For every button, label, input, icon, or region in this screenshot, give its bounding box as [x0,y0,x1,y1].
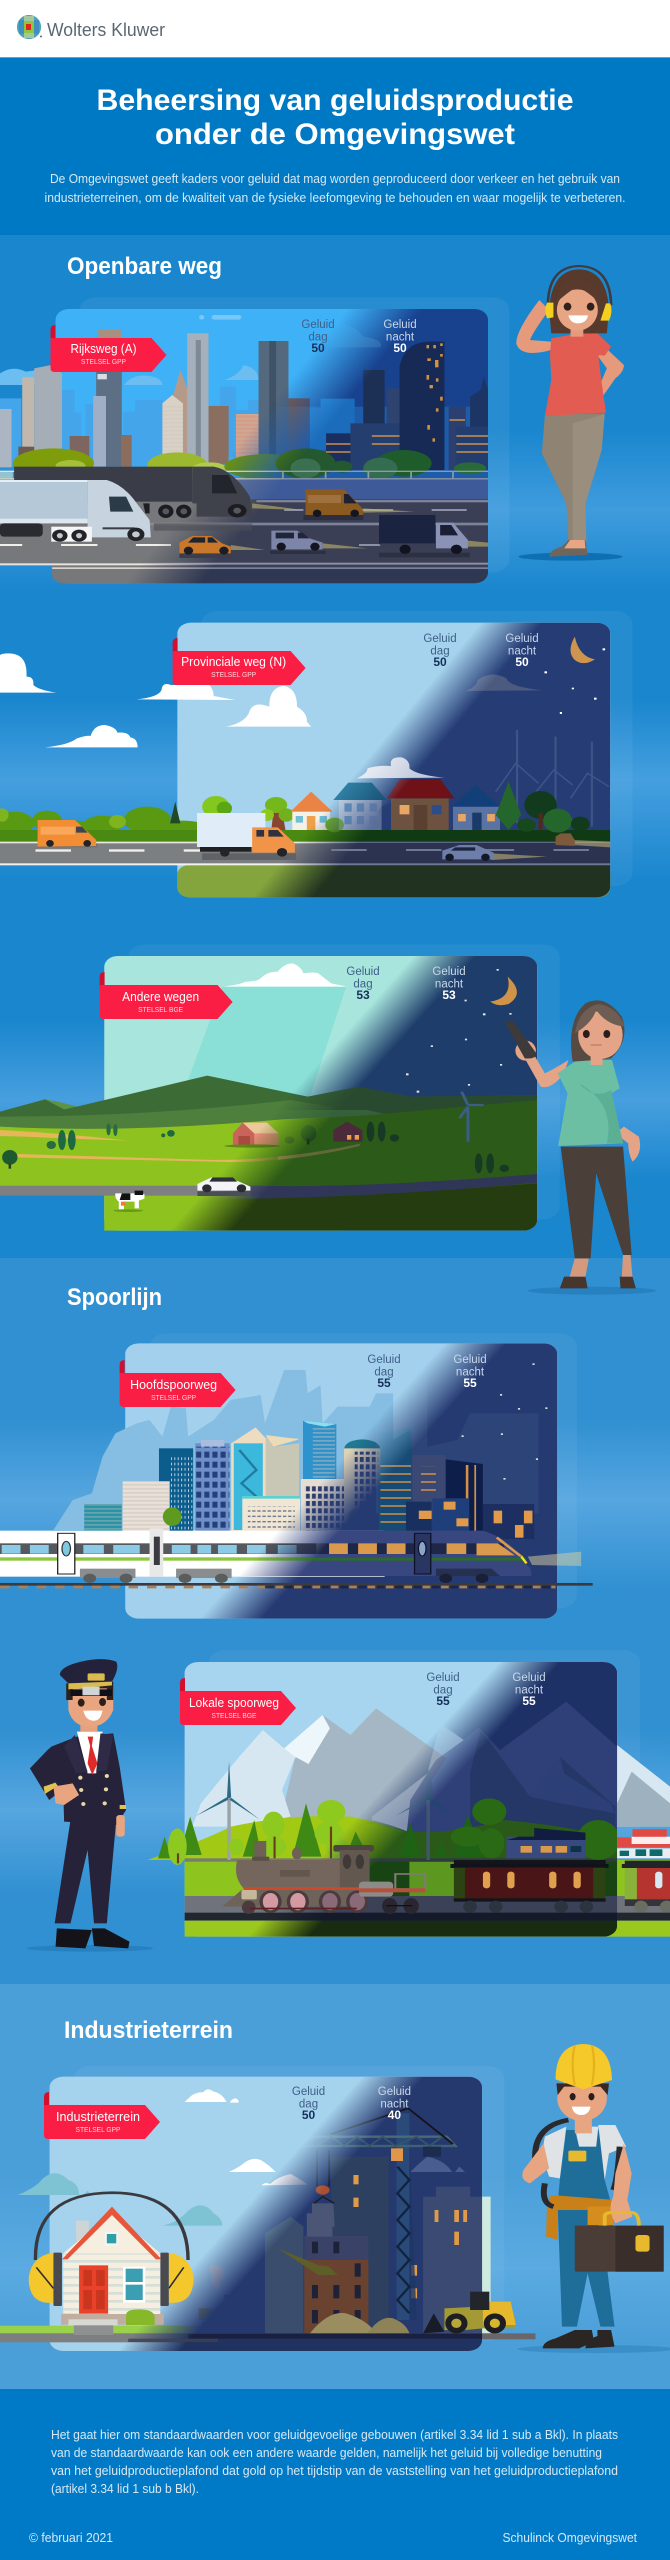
footer note: (artikel 3.34 lid 1 sub b Bkl). [51,2482,199,2496]
barn [224,1123,280,1148]
night layer of Lokale spoorweg [251,1662,618,1937]
trees [163,1507,420,1529]
train [0,1528,385,1583]
sound values: Lokale spoorweg: Geluid [426,1672,460,1684]
heading: Openbare weg: Openbare weg [67,253,222,280]
panel: Provinciale weg scene [0,611,632,897]
cloud [223,963,347,987]
sound values: Hoofdspoorweg: dag [374,1366,394,1378]
label: Andere wegen: STELSEL BGE [138,1005,183,1014]
vehicle: orange van [38,820,97,847]
mountains day [192,1708,670,1827]
excavator arm night [278,2248,338,2275]
sound values: Provinciale weg: Geluid [505,633,539,645]
trees day [158,1800,362,1865]
logo text: Wolters Kluwer [47,20,165,40]
intro text: industrieterreinen, om de kwaliteit van de fysieke leefomgeving te behouden en waar mogelijk te verbeteren. [44,191,626,205]
title: onder de Omgevingswet [155,118,515,151]
ground [0,2325,535,2342]
train night part [239,1531,531,1583]
sound values: Andere wegen [346,966,466,1002]
sound values: Provinciale weg: 50 [515,655,529,669]
locomotive [222,1841,425,1914]
sound values: Rijksweg: dag [308,332,328,344]
vehicles: night cars [179,489,488,558]
icon: cow [113,1191,144,1212]
sound values: Andere wegen: Geluid [346,966,380,978]
panel: Hoofdspoorweg scene [0,1333,593,1619]
trees day [2,1123,175,1169]
sound values: Andere wegen: nacht [435,978,464,990]
sound values: Rijksweg: Geluid [301,319,335,331]
sound values: Provinciale weg: nacht [508,646,537,658]
buildings day [84,1421,380,1532]
night layer of Industrieterrein [122,2076,482,2351]
label: Provinciale weg (N) [173,638,306,685]
intro text: De Omgevingswet geeft kaders voor geluid dat mag worden geproduceerd door verkeer en het gebruik van [50,172,620,186]
label: Provinciale weg (N): Provinciale weg (N) [181,654,286,669]
clouds [0,653,311,747]
footer note [51,2428,618,2496]
label: Lokale spoorweg: Lokale spoorweg [189,1695,279,1710]
title: Beheersing van geluidsproductie [96,84,574,117]
title [96,84,574,151]
sound values: Rijksweg: nacht [386,332,415,344]
label: Rijksweg (A) [50,325,166,372]
sound values: Industrieterrein: 40 [388,2108,401,2122]
excavator day and house [199,2247,325,2333]
sound values: Lokale spoorweg [426,1672,546,1708]
sound values: Lokale spoorweg: nacht [515,1684,544,1696]
vehicle: white truck [0,480,151,542]
vehicle: dark truck [14,467,252,531]
sound values: Lokale spoorweg: Geluid [512,1672,546,1684]
sound values: Industrieterrein: 50 [302,2108,315,2122]
character: woman with ear defenders [516,266,624,561]
character: woman with microphone [504,1000,656,1295]
label: Lokale spoorweg [180,1678,296,1725]
vehicle: white and orange lorry [197,813,296,860]
footer credits: © februari 2021 [29,2531,113,2545]
sound values: Hoofdspoorweg: 55 [463,1376,477,1390]
sound values: Hoofdspoorweg: 55 [377,1376,391,1390]
footer note: van de standaardwaarde kan ook een andere waarde gelden, namelijk het geluid bij volledige benutting [51,2446,602,2460]
sound values: Industrieterrein: Geluid [378,2086,411,2098]
houses day [291,783,400,832]
sound values: Provinciale weg: 50 [433,655,447,669]
sound values: Rijksweg: Geluid [383,319,417,331]
character: train conductor [26,1659,153,1952]
night layer of Rijksweg [134,309,488,584]
sound values: Industrieterrein: dag [299,2098,318,2110]
night layer of Andere wegen [174,956,538,1231]
station building [617,1829,670,1858]
night layer of Provinciale weg [257,622,610,898]
vehicle: wheel loader [444,2292,516,2333]
clouds [185,2089,308,2185]
night layer of Hoofdspoorweg [204,1343,558,1619]
footer note: Het gaat hier om standaardwaarden voor geluidgevoelige gebouwen (artikel 3.34 lid 1 sub a Bkl). In plaats [51,2428,618,2442]
label: Andere wegen [100,972,233,1019]
footer credits: Schulinck Omgevingswet [502,2531,637,2545]
label: Provinciale weg (N): STELSEL GPP [211,670,256,679]
footer note: van het geluidproductieplafond dat gold op het tijdstip van de vaststelling van het geluidproductieplafond [51,2464,618,2478]
sound values: Hoofdspoorweg [367,1354,487,1390]
windmill day [196,1762,259,1860]
icon: globe [17,15,42,39]
rails [0,1583,593,1587]
sound values: Rijksweg [301,319,417,355]
sound values: Andere wegen: 53 [442,988,456,1002]
character: construction worker [517,2044,670,2353]
train carriages [450,1829,670,1913]
sound values: Lokale spoorweg: dag [433,1684,453,1696]
label: Industrieterrein [44,2092,160,2139]
panel: Rijksweg scene [0,297,509,583]
panel: Lokale spoorweg scene [147,1650,670,1937]
label: Rijksweg (A): STELSEL GPP [81,357,126,366]
label: Andere wegen: Andere wegen [122,989,199,1004]
intro text [44,172,626,205]
sound values: Lokale spoorweg: 55 [436,1694,450,1708]
sound values: Andere wegen: Geluid [432,966,466,978]
sound values: Lokale spoorweg: 55 [522,1694,536,1708]
icon: house with ear defenders [29,2193,194,2325]
sound values: Industrieterrein: nacht [380,2098,409,2110]
panel: Industrieterrein scene [0,2066,535,2351]
sound values: Provinciale weg: dag [430,646,450,658]
sound values: Industrieterrein [292,2086,411,2122]
sound values: Rijksweg: 50 [311,341,325,355]
heading: Industrieterrein: Industrieterrein [64,2017,233,2044]
sound values: Hoofdspoorweg: Geluid [453,1354,487,1366]
sound values: Hoofdspoorweg: Geluid [367,1354,401,1366]
skyline silhouette [53,1370,410,1530]
label: Industrieterrein: STELSEL GPP [76,2125,120,2134]
label: Hoofdspoorweg: Hoofdspoorweg [130,1377,217,1392]
label: Hoofdspoorweg: STELSEL GPP [151,1393,196,1402]
sound values: Andere wegen: 53 [356,988,370,1002]
label: Industrieterrein: Industrieterrein [56,2109,140,2124]
panel: Andere wegen scene [0,944,560,1231]
sound values: Andere wegen: dag [353,978,373,990]
label: Hoofdspoorweg [120,1360,236,1407]
sound values: Provinciale weg [423,633,539,669]
heading: Spoorlijn: Spoorlijn [67,1284,162,1311]
logo: Wolters Kluwer [17,15,165,40]
label: Lokale spoorweg: STELSEL BGE [212,1711,256,1720]
vehicle: white car [197,1177,251,1196]
footer credits [29,2531,637,2545]
sound values: Industrieterrein: Geluid [292,2086,325,2098]
sound values: Provinciale weg: Geluid [423,633,457,645]
sound values: Rijksweg: 50 [393,341,407,355]
sound values: Hoofdspoorweg: nacht [456,1366,485,1378]
label: Rijksweg (A): Rijksweg (A) [70,341,136,356]
